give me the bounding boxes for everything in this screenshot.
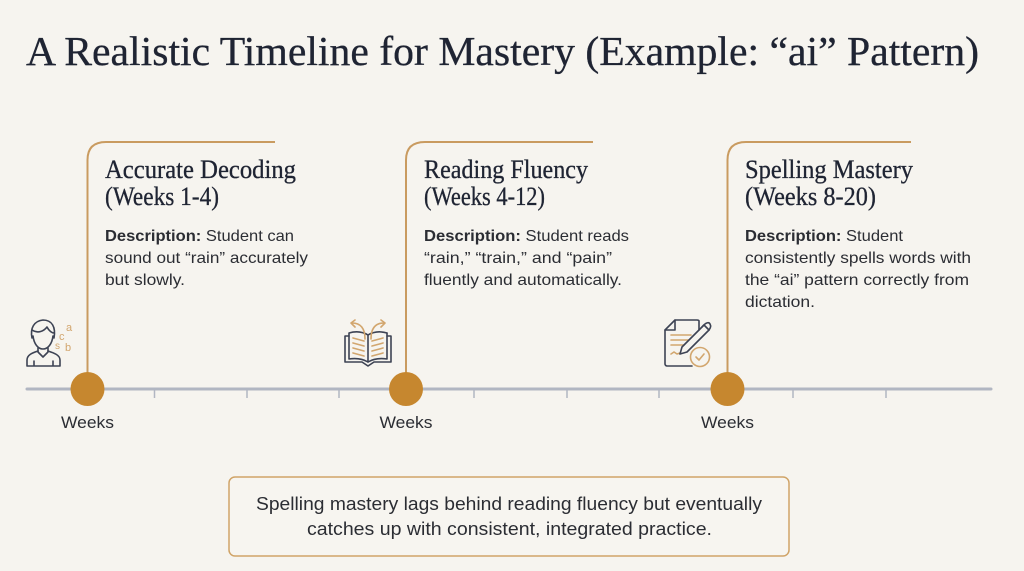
timeline axis xyxy=(27,389,991,398)
description: spelling mastery: the “ai” pattern correctly from xyxy=(745,272,969,289)
heading: accurate decoding xyxy=(105,155,296,211)
description: accurate decoding: sound out “rain” accurately xyxy=(105,250,308,267)
milestone 3: Weeks xyxy=(701,413,754,432)
icon: student with letters: s xyxy=(55,341,60,352)
description: spelling mastery xyxy=(745,228,971,311)
description: reading fluency: fluently and automatically. xyxy=(424,272,622,289)
description: spelling mastery: dictation. xyxy=(745,294,815,311)
icon: open book with arrows xyxy=(345,320,391,366)
description: spelling mastery: Description: Student xyxy=(745,228,904,245)
description: spelling mastery: consistently spells words with xyxy=(745,250,971,267)
heading: reading fluency: (Weeks 4-12) xyxy=(424,182,545,211)
description: accurate decoding: but slowly. xyxy=(105,272,185,289)
icon: document with pen and check xyxy=(665,320,711,366)
icon: student with letters: c xyxy=(59,331,65,343)
description: accurate decoding: Description: Student can xyxy=(105,228,294,245)
description: reading fluency: “rain,” “train,” and “pain” xyxy=(424,250,612,267)
heading: spelling mastery xyxy=(745,155,913,211)
milestone 1 xyxy=(61,372,114,432)
heading: spelling mastery: (Weeks 8-20) xyxy=(745,182,876,211)
callout: Spelling mastery lags behind reading fluency but eventually xyxy=(256,493,763,514)
panel: spelling mastery xyxy=(745,155,971,311)
milestone 1: Weeks xyxy=(61,413,114,432)
panel: reading fluency xyxy=(424,155,629,289)
heading: accurate decoding: Accurate Decoding xyxy=(105,155,296,184)
description: reading fluency: Description: Student reads xyxy=(424,228,629,245)
description: accurate decoding xyxy=(105,228,308,289)
milestone 2: Weeks xyxy=(380,413,432,432)
panel: accurate decoding xyxy=(105,155,308,289)
milestone 2 xyxy=(380,372,432,432)
milestone 3 xyxy=(701,372,754,432)
callout xyxy=(229,477,789,556)
icon: student with letters: a xyxy=(66,322,73,334)
description: reading fluency xyxy=(424,228,629,289)
title: A Realistic Timeline for Mastery (Example: “ai” Pattern) xyxy=(26,28,979,74)
bracket: reading fluency xyxy=(406,142,593,375)
icon: student with letters: b xyxy=(65,342,71,354)
heading: reading fluency xyxy=(424,155,588,211)
bracket: spelling mastery xyxy=(728,142,911,375)
bracket: accurate decoding xyxy=(88,142,275,375)
icon: student with letters xyxy=(27,320,73,366)
heading: accurate decoding: (Weeks 1-4) xyxy=(105,182,219,211)
heading: spelling mastery: Spelling Mastery xyxy=(745,155,913,184)
callout: catches up with consistent, integrated practice. xyxy=(307,518,712,539)
heading: reading fluency: Reading Fluency xyxy=(424,155,588,184)
